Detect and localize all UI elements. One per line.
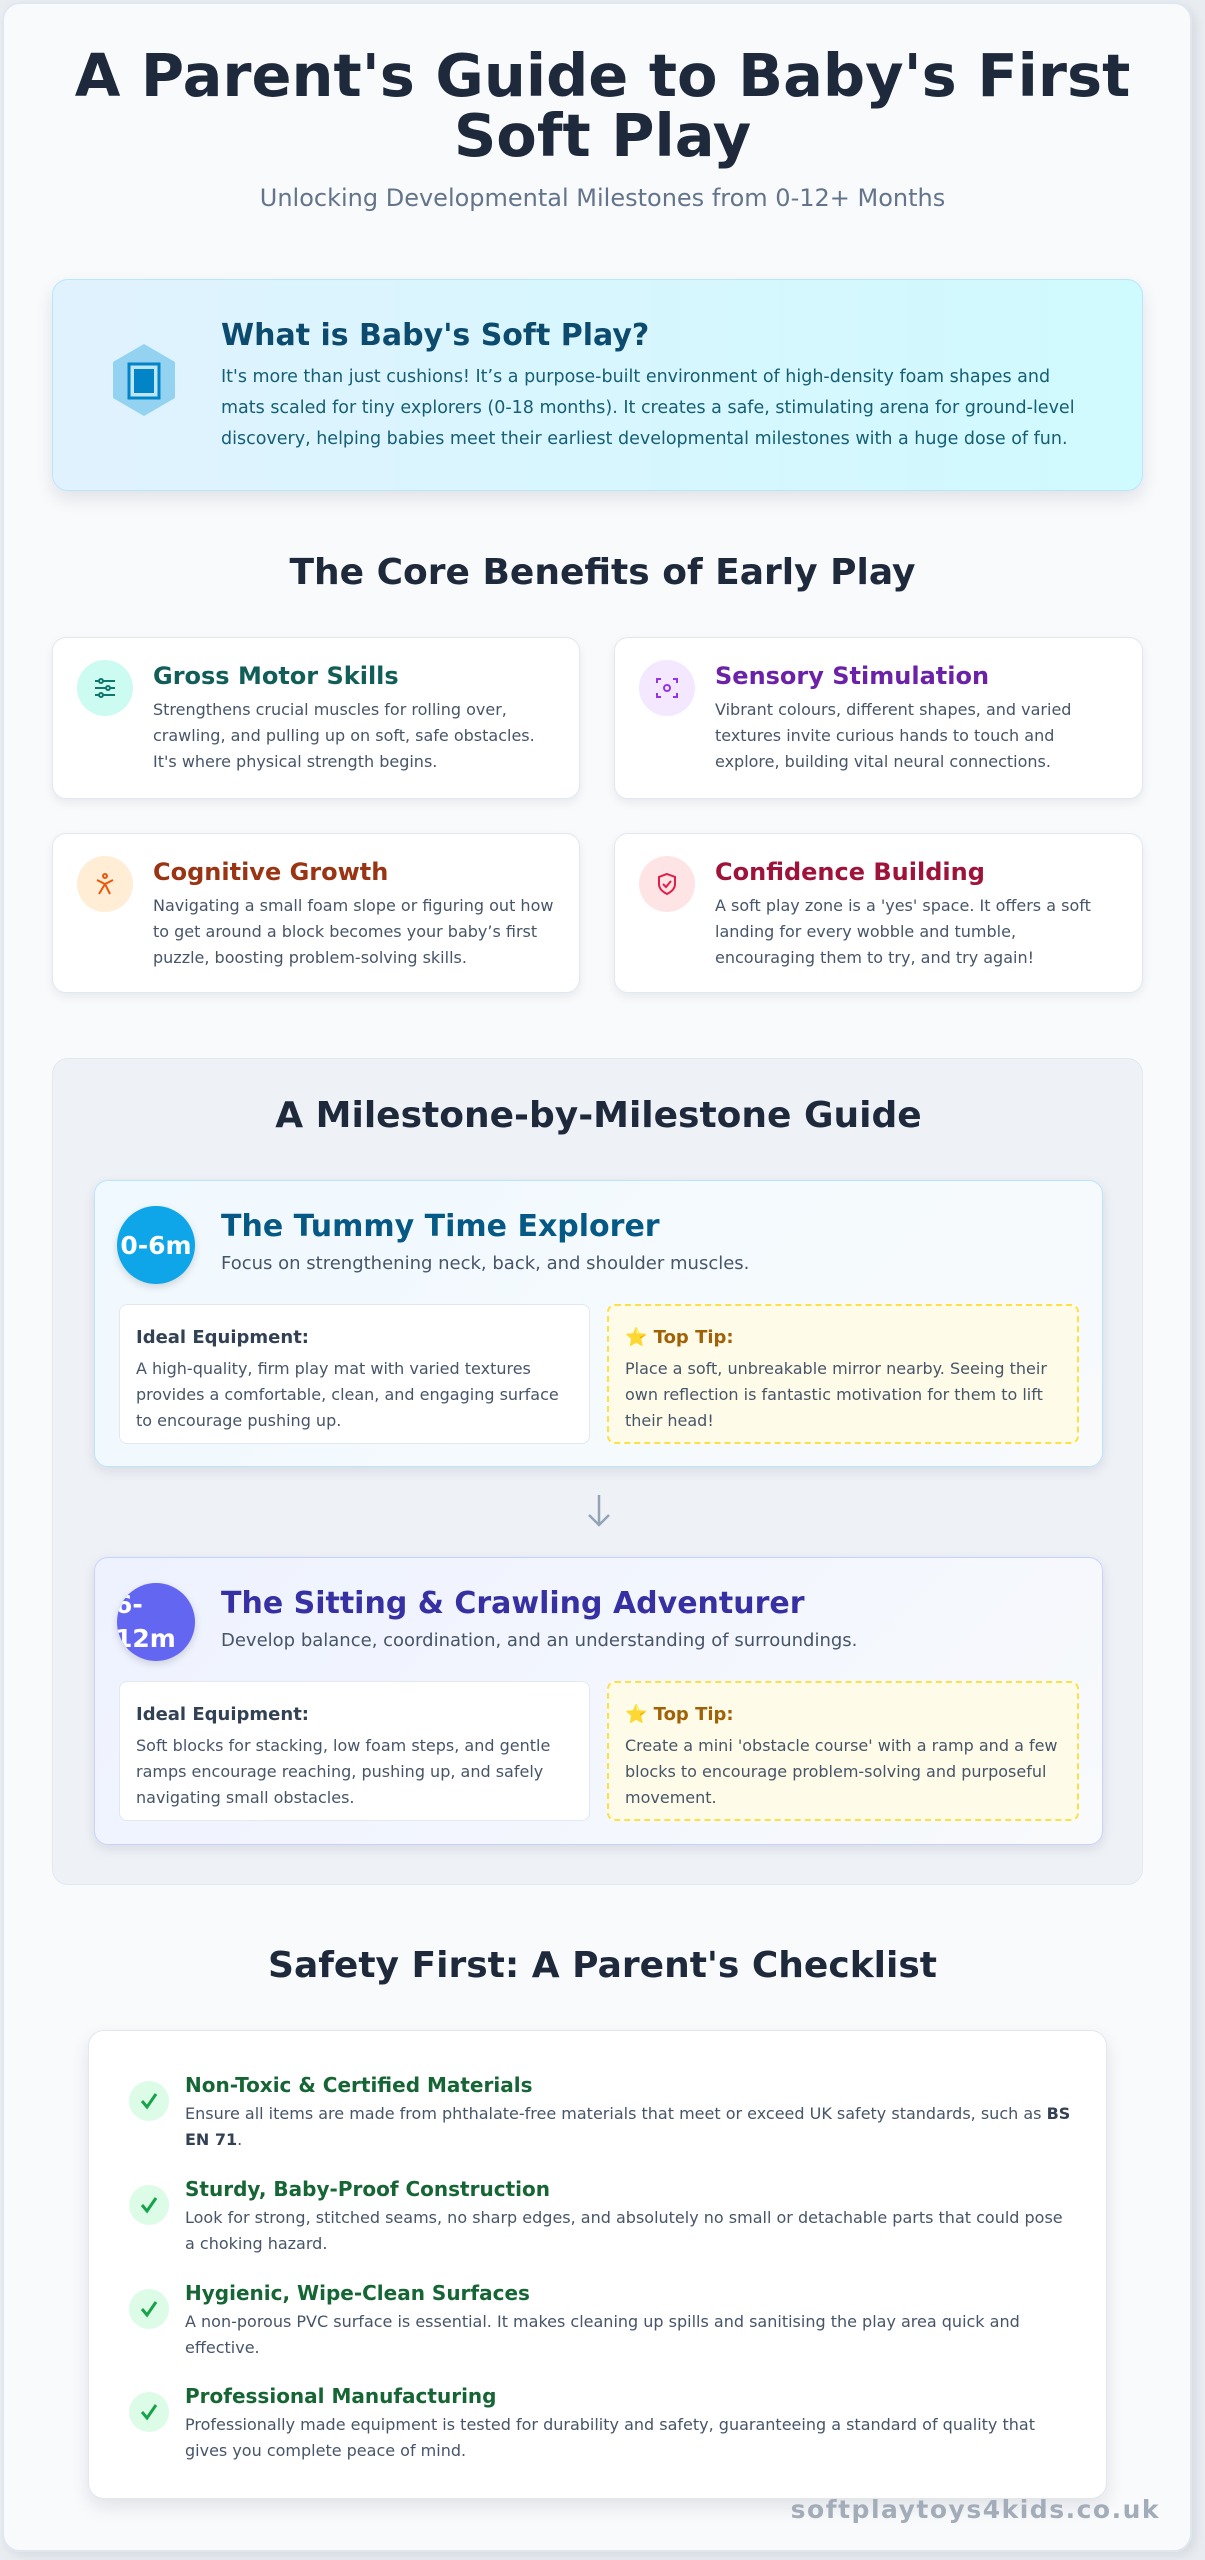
- panel: gross motor: [52, 637, 580, 799]
- equipment box: Ideal Equipment:: [136, 1327, 309, 1348]
- icon: sliders: [77, 660, 133, 716]
- stage title: The Sitting & Crawling Adventurer: [221, 1586, 805, 1621]
- item 4: [129, 2384, 1035, 2460]
- arrow: [588, 1495, 610, 1527]
- stage card: 0-6m: Focus on strengthening neck, back, and shoulder muscles.: [221, 1253, 749, 1274]
- panel: confidence: Confidence Building: [715, 858, 985, 886]
- heading: What is Baby's Soft Play?: [221, 318, 649, 353]
- panel: confidence: [614, 833, 1143, 993]
- item 2: [129, 2177, 1063, 2253]
- tip box: Place a soft, unbreakable mirror nearby. Seeing their own reflection is fantastic motivation for them to lift their head!: [625, 1359, 1047, 1430]
- panel: gross motor: Strengthens crucial muscles for rolling over, crawling, and pulling up on soft, safe obstacles. It's where physical strength begins.: [153, 700, 535, 771]
- panel: what is soft play: [52, 279, 1143, 491]
- tip box: [607, 1681, 1079, 1821]
- panel: sensory: Vibrant colours, different shapes, and varied textures invite curious hands to touch and explore, building vital neural connections.: [715, 700, 1071, 771]
- badge: [117, 1583, 195, 1661]
- stage title: The Tummy Time Explorer: [221, 1209, 660, 1244]
- panel: milestone guide: [52, 1058, 1143, 1885]
- tip box: [607, 1304, 1079, 1444]
- watermark: softplaytoys4kids.co.uk: [791, 2495, 1160, 2524]
- item 3: [129, 2281, 1020, 2357]
- text block: It's more than just cushions! It’s a purpose-built environment of high-density foam shapes and mats scaled for tiny explorers (0-18 months). It creates a safe, stimulating arena for ground-level discovery, helping babies meet their earliest developmental milestones with a huge dose of fun.: [221, 367, 1075, 449]
- heading: A Milestone-by-Milestone Guide: [275, 1095, 922, 1136]
- panel: sensory: Sensory Stimulation: [715, 662, 989, 690]
- item 3: Hygienic, Wipe-Clean Surfaces: [185, 2281, 530, 2305]
- title: Soft Play: [454, 101, 751, 170]
- stage card: 6-12m: [94, 1557, 1103, 1845]
- heading: core benefits: The Core Benefits of Early Play: [289, 552, 916, 593]
- equipment box: Soft blocks for stacking, low foam steps, and gentle ramps encourage reaching, pushing up, and safely navigating small obstacles.: [136, 1736, 550, 1807]
- equipment box: Ideal Equipment:: [136, 1704, 309, 1725]
- panel: sensory: [614, 637, 1143, 799]
- equipment box: [119, 1304, 590, 1444]
- subtitle: Unlocking Developmental Milestones from 0-12+ Months: [260, 184, 945, 212]
- item 1: [129, 2073, 1070, 2149]
- heading: safety: Safety First: A Parent's Checklist: [268, 1945, 937, 1986]
- item 2: Look for strong, stitched seams, no sharp edges, and absolutely no small or detachable parts that could pose a choking hazard.: [185, 2208, 1063, 2253]
- equipment box: [119, 1681, 590, 1821]
- panel: checklist: [88, 2030, 1107, 2499]
- tip box: ⭐ Top Tip:: [625, 1327, 734, 1348]
- panel: gross motor: Gross Motor Skills: [153, 662, 399, 690]
- item 1: Ensure all items are made from phthalate-free materials that meet or exceed UK safety standards, such as BS EN 71.: [185, 2104, 1070, 2149]
- stage card: 0-6m: [94, 1180, 1103, 1467]
- tip box: ⭐ Top Tip:: [625, 1704, 734, 1725]
- title: [75, 41, 1130, 170]
- stage card: 6-12m: Develop balance, coordination, and an understanding of surroundings.: [221, 1630, 857, 1651]
- equipment box: A high-quality, firm play mat with varied textures provides a comfortable, clean, and engaging surface to encourage pushing up.: [136, 1359, 559, 1430]
- icon: figure: [77, 856, 133, 912]
- panel: confidence: A soft play zone is a 'yes' space. It offers a soft landing for every wobble and tumble, encouraging them to try, and try again!: [715, 896, 1091, 967]
- icon: foam block: [113, 344, 175, 416]
- item 4: Professional Manufacturing: [185, 2384, 496, 2408]
- item 4: Professionally made equipment is tested for durability and safety, guaranteeing a standard of quality that gives you complete peace of mind.: [185, 2415, 1035, 2460]
- badge: 0-6m: [120, 1230, 192, 1260]
- panel: cognitive: Navigating a small foam slope or figuring out how to get around a block becomes your baby’s first puzzle, boosting problem-solving skills.: [153, 896, 553, 967]
- badge: [117, 1206, 195, 1284]
- tip box: Create a mini 'obstacle course' with a ramp and a few blocks to encourage problem-solving and purposeful movement.: [625, 1736, 1058, 1807]
- item 2: Sturdy, Baby-Proof Construction: [185, 2177, 550, 2201]
- item 3: A non-porous PVC surface is essential. It makes cleaning up spills and sanitising the play area quick and effective.: [185, 2312, 1020, 2357]
- title: A Parent's Guide to Baby's First: [75, 41, 1130, 110]
- panel: cognitive: Cognitive Growth: [153, 858, 388, 886]
- icon: shield: [639, 856, 695, 912]
- item 1: Non-Toxic & Certified Materials: [185, 2073, 532, 2097]
- panel: cognitive: [52, 833, 580, 993]
- icon: focus: [639, 660, 695, 716]
